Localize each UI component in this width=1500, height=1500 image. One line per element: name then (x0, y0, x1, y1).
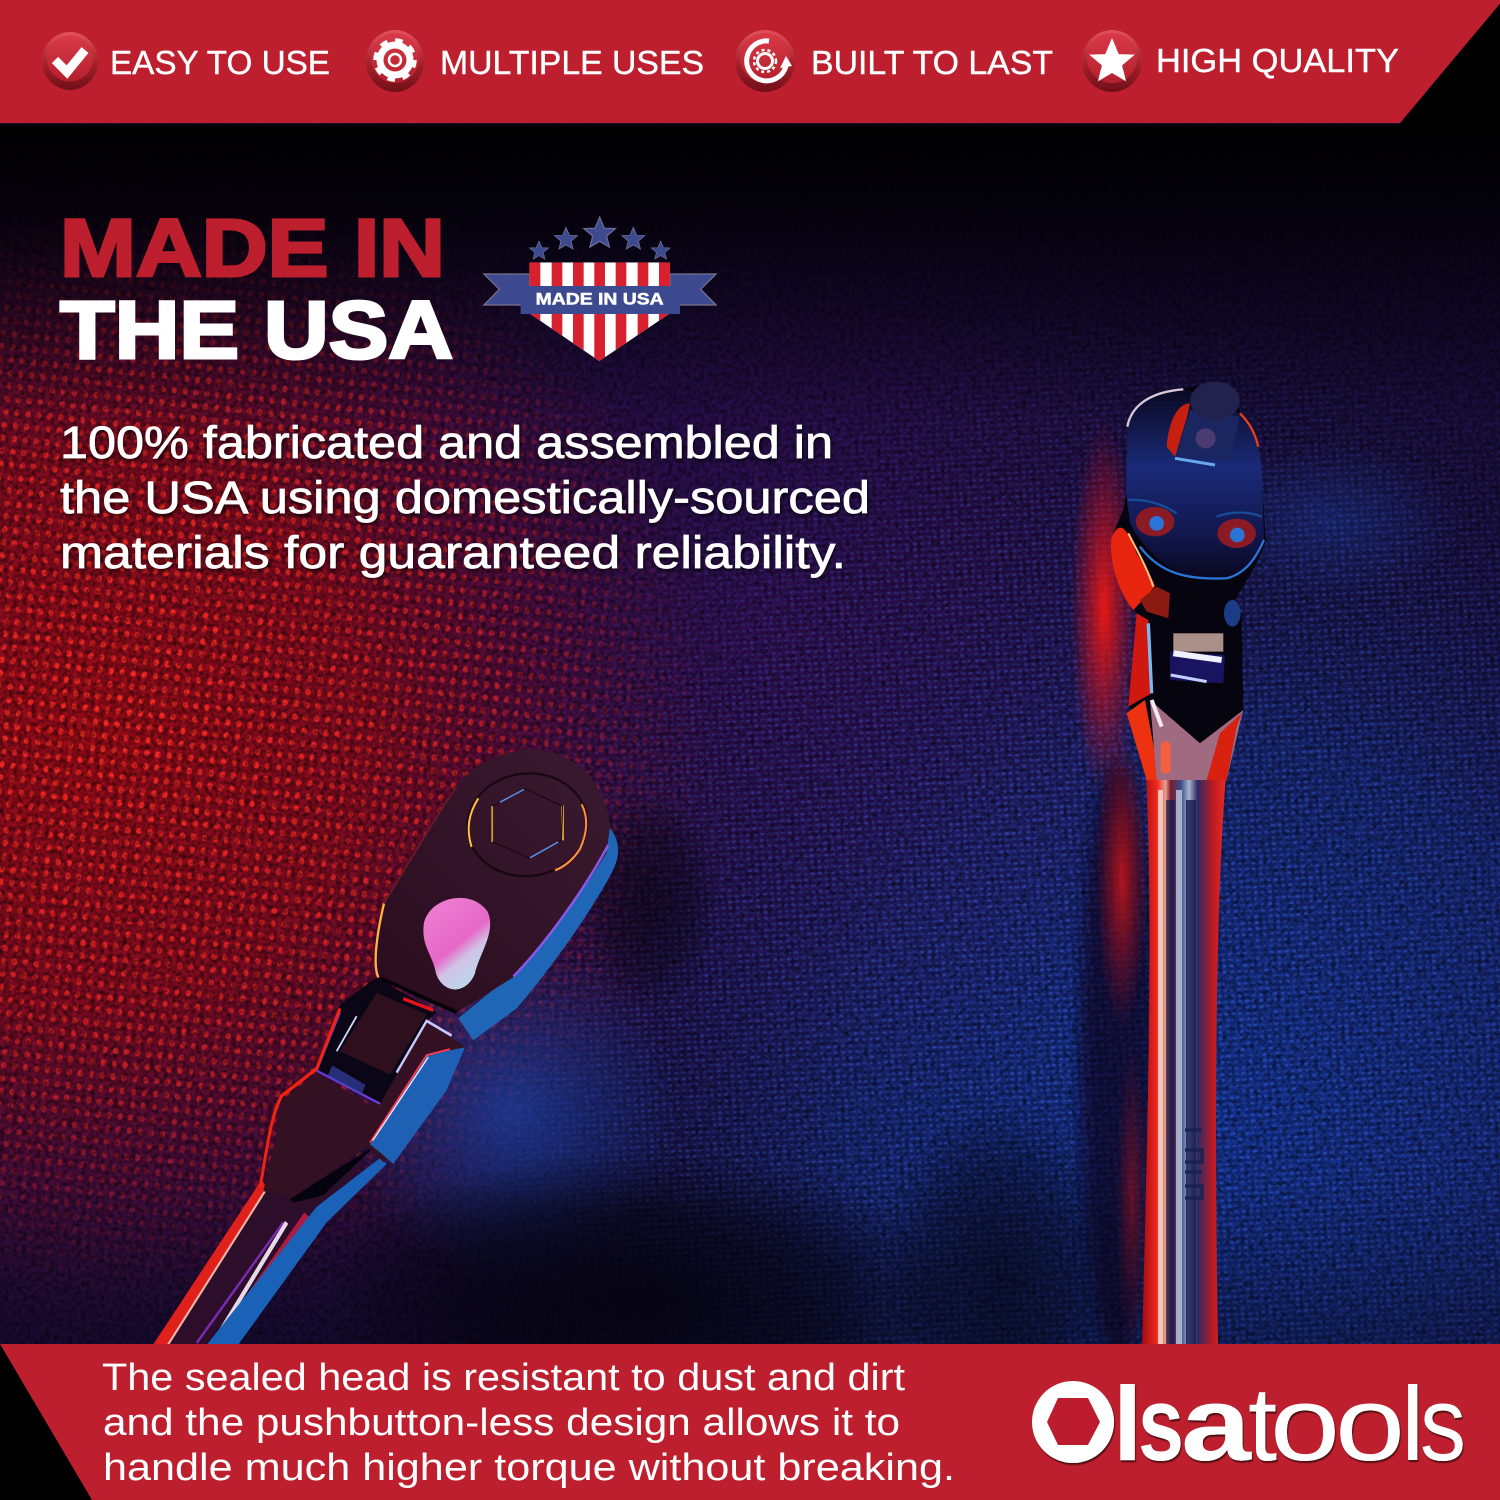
feature label: multiple uses: MULTIPLE USES (440, 44, 704, 81)
bottom red banner (0, 1344, 1500, 1500)
feature label: easy to use: EASY TO USE (110, 44, 330, 81)
ribbon text: MADE IN USA (536, 290, 664, 308)
wrench: angled flex-head ratchet on the left (152, 750, 618, 1347)
logo: Olsatools: l (1401, 1366, 1424, 1483)
shield stripes (529, 262, 670, 362)
body copy: 100% fabricated and assembled in (60, 417, 833, 468)
feature label: built to last: BUILT TO LAST (811, 44, 1053, 81)
body copy: materials for guaranteed reliability. (60, 527, 846, 578)
body copy (60, 417, 870, 578)
wrench shaft (1142, 775, 1226, 1344)
logo: Olsatools: l (1113, 1366, 1142, 1483)
icon: gear button (366, 30, 424, 92)
logo: Olsatools: O (1032, 1362, 1116, 1483)
pink reflection on push pad (423, 898, 490, 989)
heading: made in the USA (60, 203, 453, 376)
banner text: The sealed head is resistant to dust and dirt (102, 1357, 905, 1399)
top red banner (0, 0, 1500, 123)
black corner: bottom left (0, 1344, 92, 1500)
wrench head plate (376, 750, 610, 1012)
badge: made in USA shield (484, 217, 716, 362)
wrench shaft (152, 1145, 387, 1347)
ribbon band (521, 286, 680, 314)
heading: made in the USA: MADE IN (60, 203, 445, 294)
icon: star button (1082, 30, 1142, 92)
logo: Olsatools: s (1420, 1366, 1466, 1483)
feature label: high quality: HIGH QUALITY (1156, 42, 1399, 79)
socket circle and hexagon (465, 770, 590, 880)
body copy: the USA using domestically-sourced (60, 472, 870, 523)
logo: Olsatools: o (1270, 1366, 1340, 1483)
logo: Olsatools: o (1335, 1366, 1405, 1483)
wrench hinge and neck (260, 977, 465, 1197)
wrench head and neck (1111, 381, 1266, 780)
badge stars (529, 217, 670, 259)
wrench: upright ratchet on the right (1111, 381, 1266, 1344)
wrench blue side edge (458, 828, 618, 1040)
icon: check mark button (42, 32, 98, 90)
banner text: and the pushbutton-less design allows it to (103, 1402, 900, 1444)
banner text: handle much higher torque without breaking. (103, 1447, 955, 1489)
black corner: top right (1400, 0, 1500, 124)
icon: gear with circular arrow button (735, 30, 795, 92)
ribbon tails (484, 274, 716, 305)
engraved marks on shaft (1185, 1130, 1202, 1198)
heading: made in the USA: THE USA (60, 285, 453, 376)
logo: Olsatools: a (1181, 1366, 1253, 1483)
logo: Olsatools: s (1138, 1366, 1184, 1483)
logo: Olsatools (1032, 1362, 1466, 1483)
banner text (102, 1357, 955, 1489)
logo: Olsatools: t (1248, 1366, 1277, 1483)
